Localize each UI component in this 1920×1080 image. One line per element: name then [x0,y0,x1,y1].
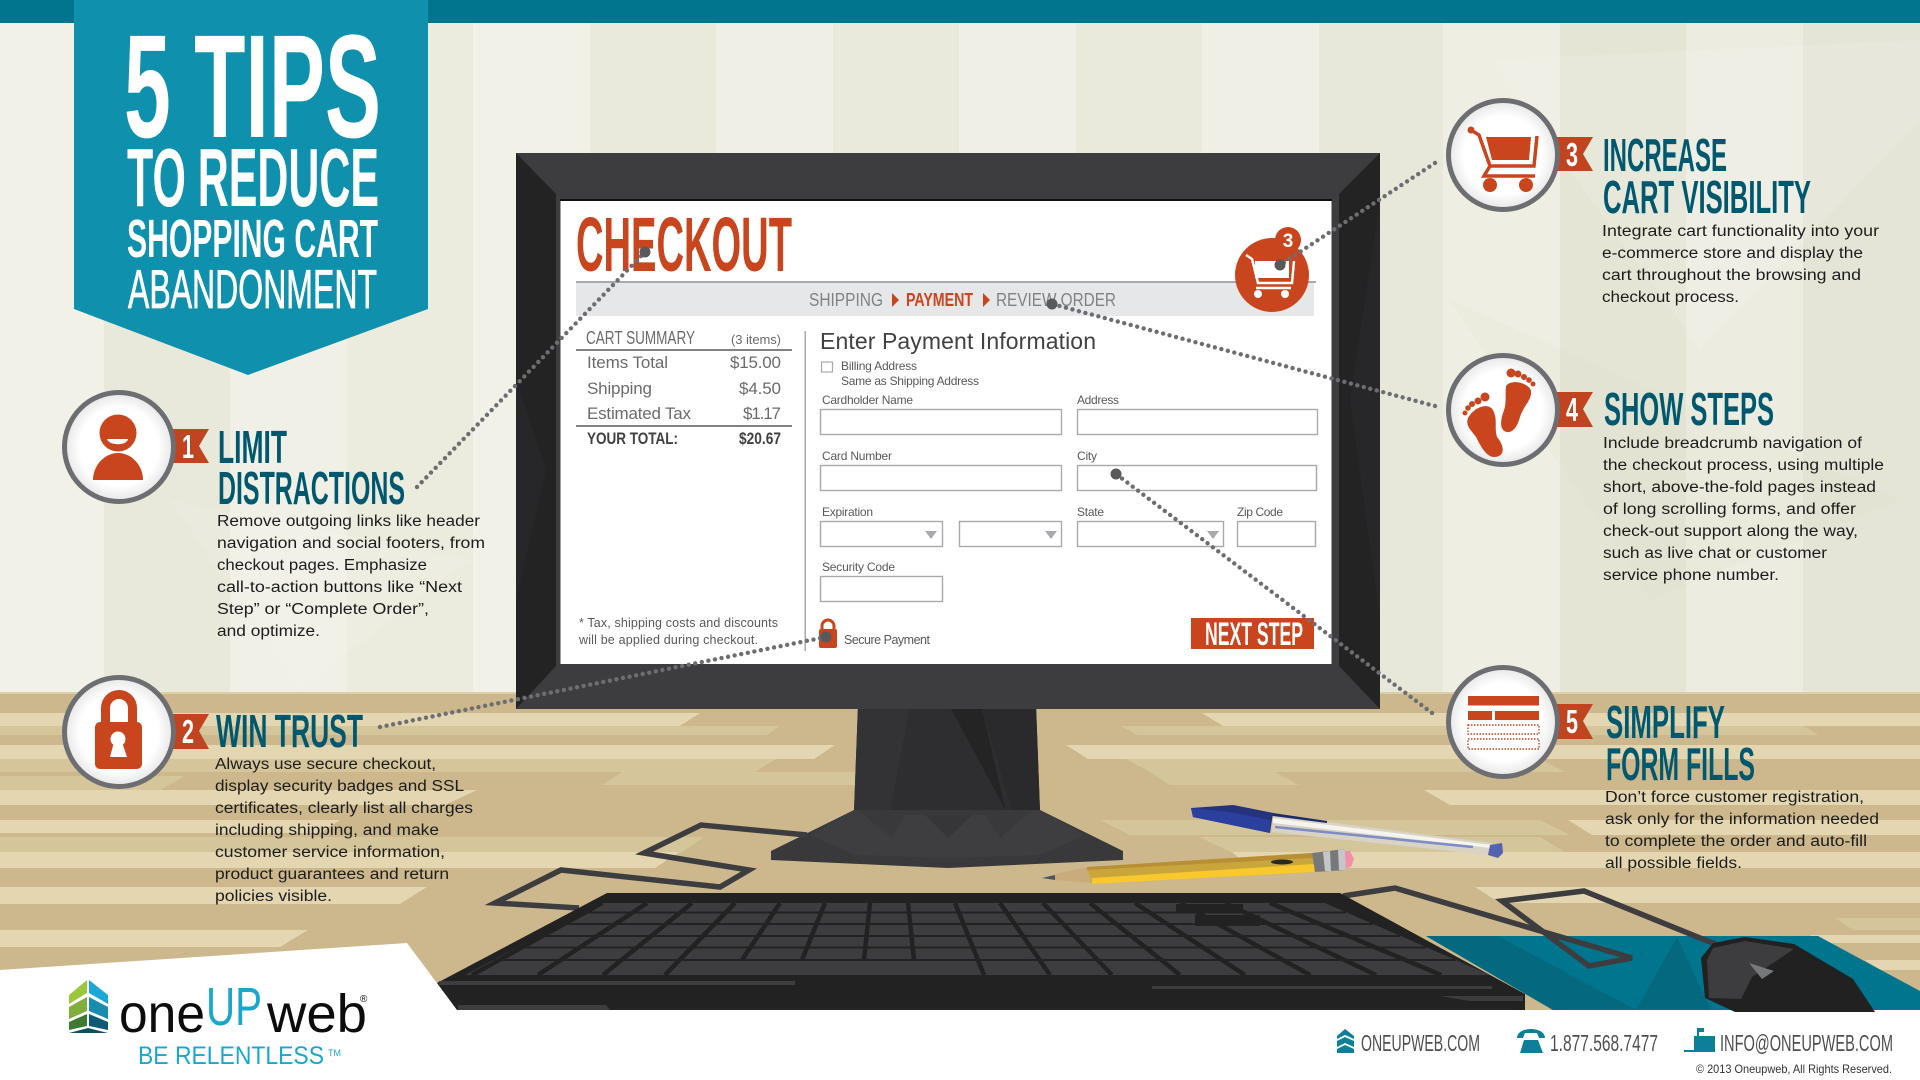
body 1: navigation and social footers, from [217,535,485,552]
tip 5: simplify form fills [1448,668,1879,872]
cart summary: Shipping [587,379,652,398]
body 5: Don’t force customer registration, [1605,789,1864,806]
ribbon 3 [1553,136,1593,173]
payment form: Cardholder Name [822,393,913,407]
cable: keyboard to mouse [1343,888,1715,966]
ribbon 4: 4 [1566,391,1578,428]
body 3: e-commerce store and display the [1602,245,1863,262]
payment form: Same as Shipping Address [841,374,979,388]
oneupweb logo: web [266,984,367,1044]
body 1: and optimize. [217,623,320,640]
tip 4: show steps [1448,356,1884,584]
icon: logo leaves [69,980,108,1033]
body 1: call-to-action buttons like “Next [217,579,463,596]
breadcrumb bar [576,281,1316,316]
body 3: Integrate cart functionality into your [1602,223,1879,240]
body 4: Include breadcrumb navigation of [1603,435,1863,452]
website contact [1337,1029,1480,1056]
oneupweb logo: UP [206,977,262,1037]
body 3: checkout process. [1602,289,1739,306]
heading 4: SHOW STEPS [1604,383,1774,435]
ribbon 2 [170,713,209,750]
title text: ABANDONMENT [128,258,377,320]
body 4: short, above-the-fold pages instead [1603,479,1876,496]
body 2: certificates, clearly list all charges [215,800,473,817]
cart summary: YOUR TOTAL: [587,429,678,448]
breadcrumb bar: SHIPPING [809,290,883,310]
breadcrumb bar: PAYMENT [906,290,973,310]
payment form: Security Code [822,560,895,574]
tip 1 connector [417,246,650,487]
cart summary: CART SUMMARY [586,328,695,348]
oneupweb logo [69,977,368,1070]
footer contacts [1337,1028,1893,1076]
body 1: checkout pages. Emphasize [217,557,427,574]
tax note: will be applied during checkout. [578,633,758,647]
cart summary: $4.50 [739,379,781,398]
next step button [1191,616,1314,652]
oneupweb logo: one [119,984,205,1044]
body 5: ask only for the information needed [1605,811,1879,828]
checkout screen [560,201,1332,664]
body 2: product guarantees and return [215,866,449,883]
ribbon 1 [170,428,209,465]
cart badge: 3 [1283,231,1293,252]
logo backing and footer panel [0,943,1920,1080]
tax note: * Tax, shipping costs and discounts [579,616,778,630]
body 2 [215,756,473,905]
body 1 [217,513,485,640]
website contact: ONEUPWEB.COM [1361,1030,1480,1056]
payment form: Card Number [822,449,892,463]
body 5: to complete the order and auto-fill [1605,833,1867,850]
tip 2 connector [380,632,832,727]
ribbon 4 [1553,391,1593,428]
cart summary: Estimated Tax [587,404,692,423]
checkout screen: CHECKOUT [576,202,792,288]
payment form: Enter Payment Information [820,328,1096,354]
body 4: such as live chat or customer [1603,545,1827,562]
payment form: Billing Address [841,359,917,373]
email contact [1684,1028,1893,1056]
title text [124,5,381,320]
body 2: customer service information, [215,844,445,861]
heading 5: SIMPLIFY [1606,696,1725,748]
body 2: display security badges and SSL [215,778,464,795]
ribbon 5 [1553,703,1593,740]
oneupweb logo: TM [328,1048,341,1058]
breadcrumb bar: REVIEW ORDER [996,290,1116,310]
body 4: service phone number. [1603,567,1779,584]
heading 1: DISTRACTIONS [218,462,405,514]
secure payment lock: Secure Payment [844,633,931,647]
next step button: NEXT STEP [1205,616,1303,652]
body 4 [1603,435,1884,584]
payment form [820,328,1318,602]
heading 5: FORM FILLS [1606,738,1755,790]
payment form: Address [1077,393,1119,407]
copyright: © 2013 Oneupweb, All Rights Reserved. [1696,1062,1892,1076]
heading 2: WIN TRUST [216,705,363,757]
title text: TO REDUCE [127,131,379,224]
body 1: Remove outgoing links like header [217,513,480,530]
heading 1: LIMIT [218,421,287,473]
wall background [0,0,1920,700]
heading 3 [1603,129,1811,223]
icon: person [64,392,174,502]
ribbon 1: 1 [182,428,194,465]
heading 3: INCREASE [1603,129,1727,181]
tip 2: win trust [64,678,473,905]
cart badge [1235,227,1309,312]
cart summary: $1.17 [743,404,781,423]
tip 5 connector [1110,468,1432,713]
body 5 [1605,789,1879,872]
mouse pad [1426,936,1920,1010]
pencil [1042,849,1354,884]
body 1: Step” or “Complete Order”, [217,601,429,618]
body 4: of long scrolling forms, and offer [1603,501,1856,518]
tip 3: increase cart visibility [1448,100,1879,306]
cart summary: Items Total [587,353,668,372]
body 2: policies visible. [215,888,332,905]
keyboard [437,893,1525,1010]
oneupweb logo: ® [360,994,368,1005]
body 3: cart throughout the browsing and [1602,267,1861,284]
secure payment lock [819,620,931,648]
tip 3 connector [1274,163,1435,270]
icon: footprints [1448,356,1558,464]
ribbon 3: 3 [1566,136,1578,173]
cart summary: $15.00 [730,353,781,372]
icon: shopping cart [1448,100,1558,210]
cable: keyboard to monitor [495,825,807,908]
pen [1191,805,1503,858]
body 4: the checkout process, using multiple [1603,457,1884,474]
payment form: Expiration [822,505,873,519]
phone contact [1517,1029,1658,1056]
body 2: including shipping, and make [215,822,439,839]
desk surface with wood stripes [0,692,1920,1022]
tax note [578,616,778,647]
cart summary: $20.67 [739,429,781,448]
icon: form fields [1448,668,1558,776]
payment form: State [1077,505,1104,519]
body 4: check-out support along the way, [1603,523,1858,540]
oneupweb logo: BE RELENTLESS [138,1042,324,1070]
body 3 [1602,223,1879,306]
title text: 5 TIPS [124,5,381,169]
icon: padlock [64,678,174,786]
payment form: Zip Code [1237,505,1283,519]
heading 1 [218,421,405,514]
body 2: Always use secure checkout, [215,756,436,773]
payment form: City [1077,449,1097,463]
body 5: all possible fields. [1605,855,1742,872]
ribbon 5: 5 [1566,703,1578,740]
cart summary [576,328,792,448]
tip 1: limit distractions [64,392,485,640]
monitor frame [516,153,1380,709]
mouse [1701,937,1875,1012]
title banner [74,0,428,375]
top bar [0,0,1920,23]
cart summary: (3 items) [731,332,781,347]
phone contact: 1.877.568.7477 [1550,1030,1658,1056]
ribbon 2: 2 [182,713,194,750]
tip 4 connector [1046,298,1435,406]
heading 5 [1606,696,1755,790]
monitor stand [771,705,1123,868]
title text: SHOPPING CART [127,209,378,269]
